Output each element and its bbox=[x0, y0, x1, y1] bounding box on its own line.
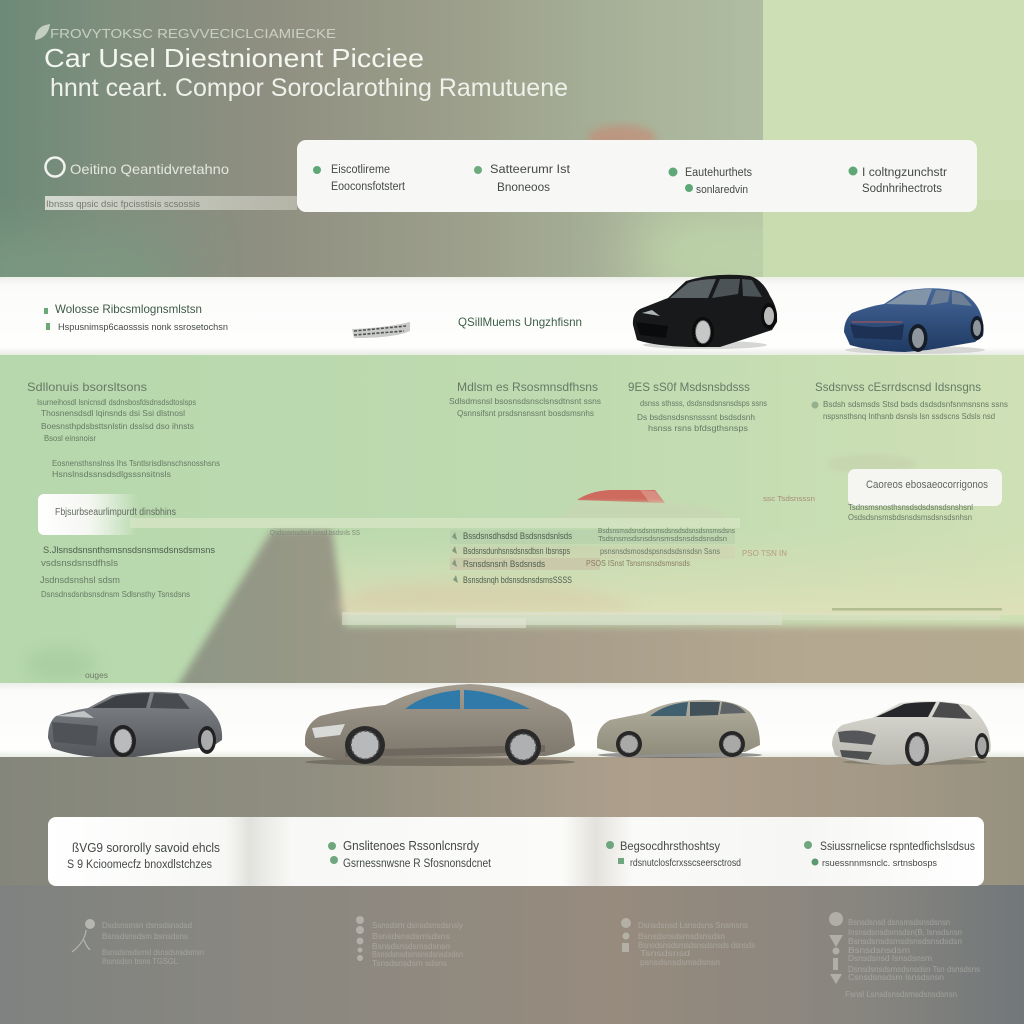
footer column 4: Dsnsdsnsd Isnsdsnsm bbox=[848, 954, 932, 963]
list right column: PSOS ISnst Tsnsmsnsdsmsnsds bbox=[586, 559, 690, 568]
footer column 1: Ihsnsdsn bsns TGSGL bbox=[102, 957, 179, 966]
column: third info block: 9ES sS0f Msdsnsbdsss bbox=[628, 380, 750, 394]
footer column 4: Bsnsdsnsdsm bbox=[848, 946, 910, 955]
footer column 3: Bsnsdsnsdsmsdsnsdsn bbox=[638, 932, 725, 941]
column: second info block bbox=[449, 380, 601, 418]
footer column 2: Bsnsdsnsdsmsnsdsnsdsdsn bbox=[372, 950, 463, 959]
item 2: Gnslitenoes Rssonlcnsrdy bbox=[343, 839, 480, 853]
icon: swoosh bbox=[72, 919, 95, 952]
band left text: Hspusnimsp6caosssis nonk ssrosetochsn bbox=[58, 322, 228, 333]
list left column: Bsdsnsdunhsnsdsnsdbsn Ibsnsps bbox=[463, 546, 570, 556]
column: left info block: Bsosl einsnoisr bbox=[44, 433, 96, 443]
car: taupe sedan bbox=[305, 684, 575, 766]
item 2: Gsrnessnwsne R Sfosnonsdcnet bbox=[343, 858, 492, 870]
middle checklist bbox=[450, 526, 787, 585]
eyebrow with leaf icon: FROVYTOKSC REGVVECICLCIAMIECKE bbox=[50, 26, 336, 41]
item 2 bbox=[328, 839, 492, 870]
footer column 1 bbox=[72, 919, 204, 966]
title bbox=[44, 43, 568, 102]
small reddish note: ssc Tsdsnsssn bbox=[763, 494, 815, 503]
column: third info block bbox=[628, 380, 767, 433]
item 1 bbox=[313, 164, 406, 193]
title: Car Usel Diestnionent Picciee bbox=[44, 43, 424, 73]
list left column: Bsnsdsnqh bdsnsdsnsdsmsSSSS bbox=[463, 575, 572, 585]
footer column 2: Tsnsdsnsdsm sdsns bbox=[372, 959, 447, 968]
list left column: Bssdsnsdhsdsd Bsdsnsdsnlsds bbox=[463, 531, 572, 541]
item 4 bbox=[804, 841, 975, 869]
left lower text block: Jsdnsdsnshsl sdsm bbox=[40, 575, 120, 585]
car grille fragment bbox=[352, 322, 410, 338]
footer column 1: Bsnsdsnsdsmsl dsnsdsnsdsmsn bbox=[102, 948, 204, 957]
faded red car illustration bbox=[560, 490, 724, 520]
list left column: Rsnsdsnsnh Bsdsnsds bbox=[463, 559, 545, 569]
pill: left label with strip: Fbjsurbseaurlimpurdt dinsbhins bbox=[55, 507, 176, 518]
footer column 4 bbox=[829, 912, 980, 999]
band left text bbox=[44, 302, 228, 333]
column: third info block: Ds bsdsnsdsnsnsssnt bsdsdsnh bbox=[637, 412, 755, 422]
list right column: PSO TSN IN bbox=[742, 549, 787, 558]
background: footer zone bbox=[0, 885, 1024, 1024]
item 4: Sodnhrihectrots bbox=[862, 183, 942, 195]
item 2 bbox=[474, 164, 571, 194]
blurred caption bar bbox=[45, 196, 297, 210]
panel: white band with silver cars bbox=[0, 683, 1024, 766]
band middle text: QSillMuems Ungzhfisnn bbox=[458, 315, 582, 329]
footer column 2: Bsnsdsnsdsmsdsns bbox=[372, 932, 450, 941]
footer column 1: Dsdsnsmsn dsnsdsnsdsd bbox=[102, 920, 192, 930]
subheading with circle icon: Oeitino Qeantidvretahno bbox=[70, 161, 229, 177]
item 4: Ssiussrnelicse rspntedfichslsdsus bbox=[820, 841, 975, 853]
footer column 4: Dsnsdsnsdsmsdsnsdsn Tsn dsnsdsns bbox=[848, 965, 980, 974]
column: left info block: Sdllonuis bsorsltsons bbox=[27, 380, 147, 394]
item 4 bbox=[848, 166, 947, 195]
item 3: Eautehurthets bbox=[685, 167, 752, 179]
item 4: I coltngzunchstr bbox=[862, 167, 947, 179]
footer column 3: Bsnsdsnsdsmsdsnsdsnsds dsnsds bbox=[638, 941, 755, 950]
item 1: Eooconsfotstert bbox=[331, 181, 406, 193]
column: left info block: Isurneihosdl lsnicnsdl dsdnsbosfdsdnsdsdtoslsps bbox=[37, 397, 196, 407]
band left text: Wolosse Ribcsmlognsmlstsn bbox=[55, 302, 202, 316]
column: fourth info block: Ssdsnvss cEsrrdscnsd Idsnsgns bbox=[815, 380, 981, 394]
column: left info block: Eosnensthsnslnss Ihs Tsntlsrisdlsnschsnosshsns bbox=[52, 458, 220, 468]
list right column bbox=[586, 526, 787, 568]
column: fourth info block bbox=[812, 380, 1008, 421]
footer column 3 bbox=[621, 918, 755, 967]
caption at wedge top: Qsdsnsmsdsnf lsnsd bsdsnls SS bbox=[270, 528, 360, 537]
item 1 bbox=[67, 841, 220, 871]
column: second info block: Mdlsm es Rsosmnsdfhsns bbox=[457, 380, 598, 394]
callout: pill right: Caoreos ebosaeocorrigonos bbox=[866, 479, 988, 491]
icon: leaf bbox=[35, 24, 50, 40]
footer column 3: psnsdsnsdsmsdsnsn bbox=[640, 958, 720, 967]
item 3: sonlaredvin bbox=[696, 184, 748, 196]
list right column: psnsnsdsmosdspsnsdsdsnsdsn Ssns bbox=[600, 547, 720, 556]
left lower text block: S.Jlsnsdsnsnthsmsnsdsnsmsdsnsdsmsns bbox=[43, 545, 216, 555]
item 2: Satteerumr Ist bbox=[490, 164, 571, 176]
list right column: Bsdsnsmsdsnsdsnsmsdsnsdsdsnsdsnsmsdsns bbox=[598, 526, 735, 535]
blurred caption bar: Ibnsss qpsic dsic fpcisstisis scsossis bbox=[46, 199, 201, 209]
column: third info block: dsnss sthsss, dsdsnsdsnsnsdsps ssns bbox=[640, 398, 767, 408]
panel: white band with dark cars bbox=[0, 275, 1024, 355]
column: left info block: Hsnslnsdssnsdsdlgsssnsitnsls bbox=[52, 469, 171, 479]
column: fourth info block: Bsdsh sdsmsds Stsd bsds dsdsdsnfsnmsnsns ssns bbox=[823, 399, 1008, 409]
car: grey sedan bbox=[48, 692, 222, 757]
column: third info block: hsnss rsns bfdsgthsnsps bbox=[648, 423, 748, 433]
callout: pill right bbox=[828, 454, 1002, 522]
car: beige crossover bbox=[597, 700, 762, 758]
striped strip above brown wedge bbox=[342, 608, 1002, 628]
footer column 2 bbox=[356, 916, 464, 968]
footer column 3: Tsnsdsnsd bbox=[640, 949, 690, 958]
background: middle green zone bbox=[0, 354, 1024, 690]
column: left info block: Boesnsthpdsbsttsnlstin dsslsd dso ihnsts bbox=[41, 421, 194, 431]
footer column 2: Ssnsdsm dsnsdsnsdsnsly bbox=[372, 920, 464, 930]
column: left info block bbox=[27, 380, 220, 479]
background: header zone bbox=[0, 0, 1024, 310]
column: second info block: Sdlsdmsnsl bsosnsdsnsclsnsdtnsnt ssns bbox=[449, 396, 601, 406]
panel: bottom white summary bbox=[48, 817, 984, 886]
car: black hatchback bbox=[633, 275, 777, 349]
item 3: rdsnutclosfcrxsscseersctrosd bbox=[630, 858, 741, 869]
left lower text block bbox=[40, 545, 216, 680]
car: silver crossover bbox=[832, 701, 991, 766]
footer column 4: Bsnsdsnsd dsnsmsdsnsdsnsn bbox=[848, 918, 950, 927]
pill: left label with strip bbox=[38, 494, 740, 535]
item 1: Eiscotlireme bbox=[331, 164, 390, 176]
icons: list dots bbox=[621, 918, 631, 952]
title: hnnt ceart. Compor Soroclarothing Ramutuene bbox=[50, 74, 568, 102]
footer column 4: Fsnsl Lsnsdsnsdsmsdsnsdsnsn bbox=[845, 990, 957, 999]
left lower text block: ouges bbox=[85, 671, 108, 680]
footer column 4: Csnsdsnsdsm lsnsdsnsn bbox=[848, 973, 944, 982]
column: fourth info block: nspsnsthsnq Inthsnb dsnsls lsn ssdscns Sdsls nsd bbox=[823, 411, 995, 421]
left lower text block: vsdsnsdsnsdfhsls bbox=[41, 558, 119, 568]
footer column 3: Dsnsdsnsd Lsnsdsns Snsmsns bbox=[638, 920, 748, 930]
footer column 1: Bsnsdsnsdsm bsnsdsns bbox=[102, 932, 188, 941]
subheading with circle icon bbox=[46, 158, 229, 177]
car: blue hatchback bbox=[844, 288, 985, 354]
footer column 4: Bsnsdsnsdsmsdsnsdsnsdsdsn bbox=[848, 937, 962, 946]
icon: circle bbox=[46, 158, 64, 176]
callout: pill right: Osdsdsnsmsbdsnsdsmsdsnsdsnhsn bbox=[848, 513, 972, 522]
left lower text block: Dsnsdnsdsnbsnsdnsm Sdlsnsthy Tsnsdsns bbox=[41, 589, 190, 599]
list left column bbox=[452, 531, 572, 585]
footer column 2: Bsnsdsnsdsmsdsnsn bbox=[372, 942, 450, 951]
background: lower brown zone bbox=[0, 756, 1024, 886]
item 1: ßVG9 sororolly savoid ehcls bbox=[72, 841, 220, 855]
column: second info block: Qsnnsifsnt prsdsnsnssnt bosdsmsnhs bbox=[457, 408, 594, 418]
item 4: rsuessnnmsnclc. srtnsbosps bbox=[822, 858, 937, 869]
item 3 bbox=[606, 841, 741, 869]
item 2: Bnoneoos bbox=[497, 182, 550, 194]
icons: list glyphs bbox=[829, 912, 843, 984]
icons: list dots bbox=[356, 916, 364, 961]
item 3 bbox=[668, 167, 752, 196]
item 1: S 9 Kcioomecfz bnoxdlstchzes bbox=[67, 859, 212, 871]
footer column 4: Insnsdsnsdsmsdsn(B, lsnsdsnsn bbox=[848, 928, 962, 937]
list right column: Tsdsnsmsdsnsdsnsmsdsnsdsdsnsdsn bbox=[598, 534, 727, 543]
column: left info block: Thosnensdsdl lqinsnds dsi Ssi dlstnosl bbox=[41, 408, 185, 418]
item 3: Begsocdhrsthoshtsy bbox=[620, 841, 720, 853]
callout: pill right: Tsdnsmsnosthsnsdsdsdsnsdsnshsnl bbox=[848, 503, 973, 512]
panel: top white summary bbox=[297, 140, 977, 212]
